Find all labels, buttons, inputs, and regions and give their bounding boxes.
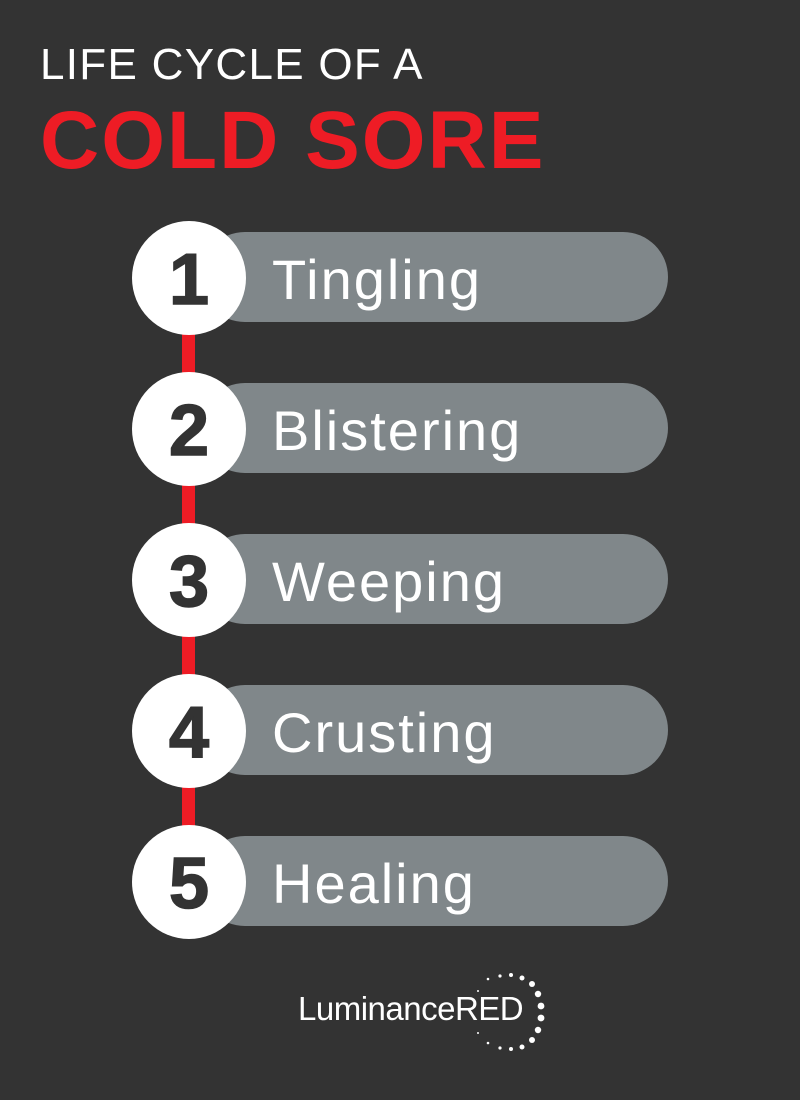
- pill 1: [200, 232, 668, 322]
- timeline connector: [182, 222, 195, 882]
- circle 2: 2: [169, 391, 209, 471]
- pill 4: Crusting: [272, 701, 497, 764]
- circle 5: [132, 825, 246, 939]
- title line 2: COLD SORE: [40, 95, 545, 186]
- pill 2: [200, 383, 668, 473]
- title line 1: LIFE CYCLE OF A: [40, 40, 424, 89]
- logo dots icon: [477, 973, 544, 1051]
- pill 4: [200, 685, 668, 775]
- step 4: [132, 674, 668, 788]
- circle 3: [132, 523, 246, 637]
- pill 3: [200, 534, 668, 624]
- step 5: [132, 825, 668, 939]
- circle 4: [132, 674, 246, 788]
- step 3: [132, 523, 668, 637]
- circle 3: 3: [169, 542, 209, 622]
- circle 1: [132, 221, 246, 335]
- step 1: [132, 221, 668, 335]
- step 2: [132, 372, 668, 486]
- pill 5: Healing: [272, 852, 476, 915]
- logo: [298, 973, 544, 1051]
- pill 3: Weeping: [272, 550, 506, 613]
- pill 5: [200, 836, 668, 926]
- circle 5: 5: [169, 844, 209, 924]
- circle 1: 1: [169, 240, 209, 320]
- circle 2: [132, 372, 246, 486]
- pill 1: Tingling: [272, 248, 482, 311]
- logo text: LuminanceRED: [298, 990, 523, 1027]
- pill 2: Blistering: [272, 399, 522, 462]
- circle 4: 4: [169, 693, 209, 773]
